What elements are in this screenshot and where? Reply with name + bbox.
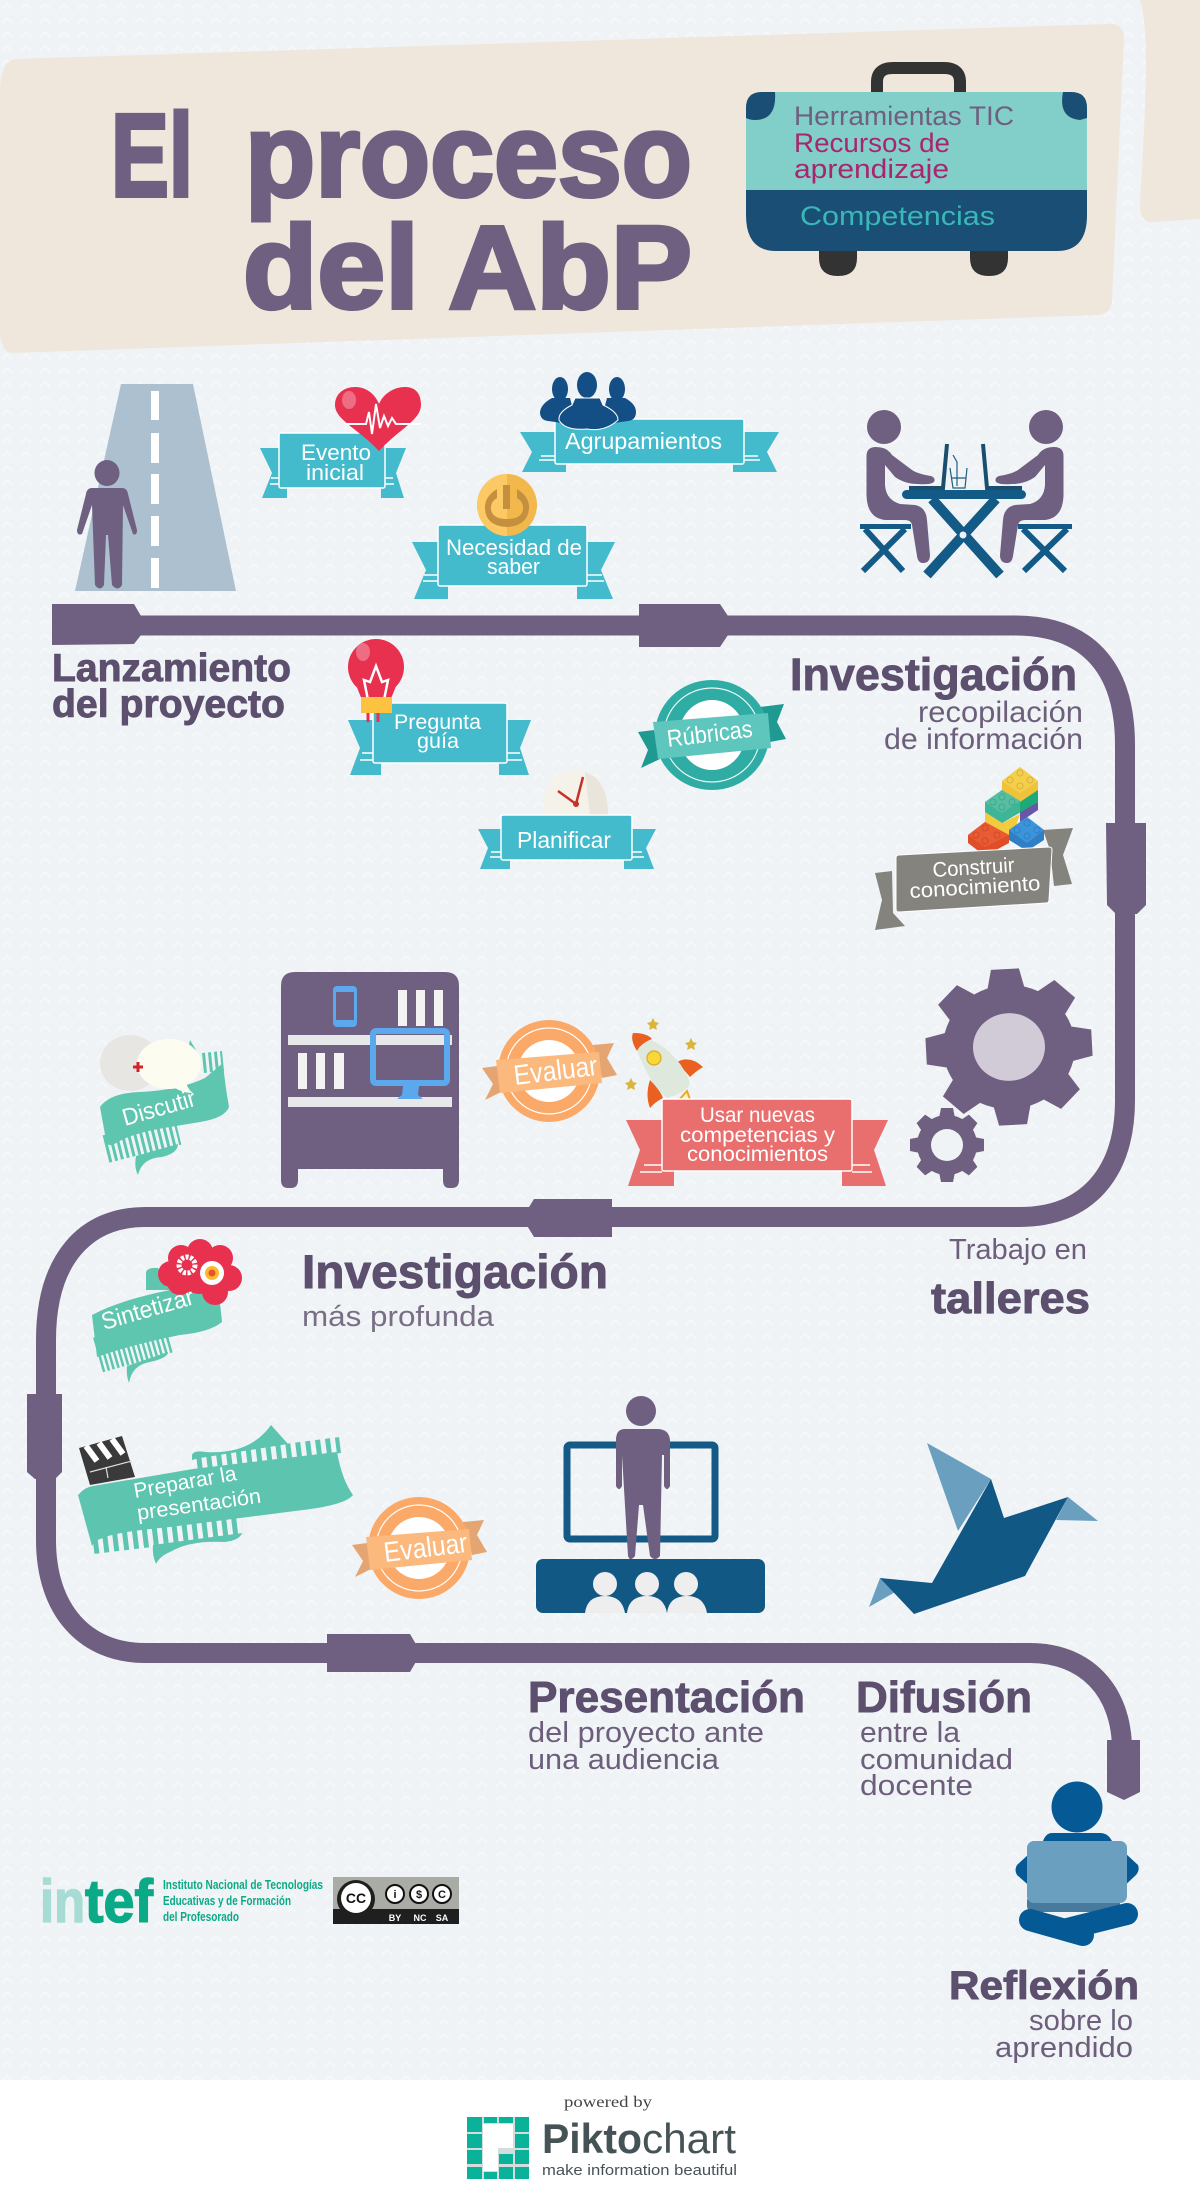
icon: presenter on stage [536, 1396, 765, 1613]
logo: creative commons: i [393, 1889, 397, 1901]
icon: heart [335, 387, 421, 451]
ribbon: Necesidad de saber [412, 474, 615, 599]
logo: creative commons: CC [346, 1890, 366, 1906]
logo: Piktochart: chart [642, 2115, 736, 2162]
ribbon: Agrupamientos: Agrupamientos [565, 428, 722, 454]
badge: Rubricas: Rúbricas [665, 716, 754, 753]
logo: creative commons: BY [389, 1913, 401, 1923]
ribbon: Usar nuevas competencias y conocimientos: Usar nuevas [700, 1104, 815, 1127]
heading: Difusion: entre la [860, 1717, 961, 1749]
icon: power button [477, 474, 537, 536]
logo: Piktochart: make information beautiful [542, 2162, 737, 2179]
heading: Investigacion recopilacion de informacion [790, 649, 1083, 756]
suitcase text: Herramientas TIC [794, 101, 1014, 131]
ribbon: Usar nuevas competencias y conocimientos: conocimientos [687, 1143, 828, 1166]
heading: Investigacion mas profunda: más profunda [302, 1301, 495, 1333]
ribbon: Preparar la presentacion [78, 1425, 353, 1564]
heading: Difusion [856, 1673, 1032, 1802]
ribbon: Sintetizar: Sintetizar [98, 1284, 197, 1336]
heading: Reflexion [949, 1964, 1139, 2064]
suitcase text: Recursos de [794, 128, 950, 158]
logo: Piktochart [467, 2115, 737, 2179]
side banner [1140, 0, 1200, 222]
logo: creative commons: C [438, 1889, 446, 1901]
table [902, 490, 1026, 575]
logo: intef: tef [85, 1868, 154, 1935]
heading: Lanzamiento del proyecto: Lanzamiento [52, 647, 291, 690]
logo: intef: in [40, 1868, 85, 1935]
ribbon: Pregunta guia: guía [417, 730, 459, 753]
heading: Reflexion: Reflexión [949, 1964, 1139, 2008]
icon: group of people [540, 372, 636, 430]
badge: Evaluar 2: Evaluar [382, 1527, 469, 1568]
icon: lego blocks [968, 767, 1044, 856]
person [77, 460, 137, 588]
right person [995, 410, 1064, 563]
logo: intef: Educativas y de Formación [163, 1893, 291, 1908]
heading: Difusion: Difusión [856, 1673, 1032, 1722]
heading: Trabajo en talleres: talleres [931, 1274, 1090, 1323]
badge: Rubricas [638, 680, 786, 790]
heading: Reflexion: aprendido [995, 2032, 1133, 2064]
ribbon: Necesidad de saber: Necesidad de [446, 535, 582, 560]
badge: Evaluar [482, 1020, 617, 1122]
logo: creative commons: $ [416, 1889, 422, 1901]
footer: powered by: powered by [564, 2094, 652, 2111]
ribbon: Discutir: Discutir [119, 1085, 199, 1132]
stools [860, 526, 1072, 571]
ribbon: Discutir [100, 1035, 229, 1175]
badge: Evaluar 2 [352, 1497, 487, 1599]
lower stripes [93, 1524, 242, 1542]
heading: Presentacion: una audiencia [528, 1744, 720, 1776]
logo: intef: Instituto Nacional de Tecnologías [163, 1877, 323, 1892]
ribbon: Sintetizar [92, 1239, 242, 1383]
ribbon: Evento inicial: inicial [306, 460, 364, 485]
ribbon: Preparar la presentacion: Preparar la [132, 1462, 239, 1503]
icon: rocket [625, 1018, 703, 1108]
ribbon: Necesidad de saber: saber [487, 554, 540, 579]
suitcase [746, 68, 1087, 276]
banner: Construir conocimiento [875, 767, 1073, 930]
icon: speech bubbles [100, 1035, 201, 1093]
ribbon: Planificar [478, 770, 656, 869]
heading: Lanzamiento del proyecto: del proyecto [52, 683, 285, 726]
laptops [909, 444, 1022, 488]
title banner [0, 24, 1124, 353]
logo: intef [40, 1868, 323, 1935]
suitcase text [794, 101, 1014, 231]
icon: small gear [910, 1108, 984, 1182]
title [111, 90, 692, 334]
ribbon: Usar nuevas competencias y conocimientos: competencias y [680, 1124, 836, 1147]
heading: Investigacion mas profunda: Investigación [302, 1245, 608, 1298]
icon: person reflecting with laptop [1016, 1782, 1139, 1935]
track connectors [27, 604, 1146, 1800]
heading: Investigacion recopilacion de informacion: de información [884, 723, 1083, 756]
ribbon: Planificar: Planificar [517, 827, 611, 853]
logo: Piktochart: Pikto [542, 2115, 642, 2162]
heading: Investigacion mas profunda [302, 1245, 608, 1333]
logo: creative commons: NC [414, 1913, 427, 1923]
icon: clock [543, 770, 608, 815]
icon: cabinet with tools [281, 972, 459, 1188]
heading: Trabajo en talleres [931, 1234, 1090, 1323]
icon: big gear [922, 965, 1096, 1129]
icon: light bulb [348, 639, 404, 722]
logo: creative commons: SA [436, 1913, 449, 1923]
phone [333, 986, 357, 1027]
suitcase text: aprendizaje [794, 154, 949, 184]
banner: Construir conocimiento: Construir [932, 854, 1015, 882]
presenter [616, 1396, 670, 1559]
ribbon: Evento inicial: Evento [301, 440, 371, 465]
ribbon: Agrupamientos [520, 372, 779, 472]
badge: Evaluar: Evaluar [512, 1050, 599, 1091]
heading: Investigacion recopilacion de informacion: recopilación [918, 696, 1083, 729]
stripes [203, 1061, 223, 1063]
suitcase text: Competencias [800, 201, 995, 231]
glass [950, 455, 967, 488]
heading: Reflexion: sobre lo [1029, 2005, 1133, 2037]
icon: clapperboard [79, 1436, 135, 1485]
heading: Presentacion: Presentación [528, 1673, 805, 1722]
ribbon: Evento inicial [260, 387, 421, 498]
audience [585, 1572, 707, 1613]
upper stripes [197, 1445, 340, 1463]
main band [78, 1452, 353, 1546]
heading: Difusion: docente [860, 1770, 973, 1802]
ribbon: Pregunta guia [348, 639, 531, 775]
ribbon: Pregunta guia: Pregunta [394, 711, 481, 734]
road with person [75, 384, 236, 591]
icon: flower with gears [158, 1239, 242, 1305]
monitor [373, 1031, 447, 1099]
left person [866, 410, 935, 563]
banner: Construir conocimiento: conocimiento [909, 872, 1041, 903]
ribbon: Usar nuevas competencias y conocimientos [626, 1099, 888, 1186]
title: El [111, 90, 193, 222]
heading: Difusion: comunidad [860, 1744, 1013, 1776]
heading: Investigacion recopilacion de informacion: Investigación [790, 649, 1077, 700]
title: del AbP [243, 202, 692, 334]
heading: Trabajo en talleres: Trabajo en [949, 1234, 1087, 1266]
icon: origami bird [869, 1443, 1098, 1614]
heading: Lanzamiento del proyecto [52, 647, 291, 726]
heading: Presentacion [528, 1673, 805, 1776]
logo: creative commons [333, 1877, 459, 1924]
logo: intef: del Profesorado [163, 1909, 239, 1924]
ribbon: Preparar la presentacion: presentación [135, 1485, 262, 1525]
icon: people working at table [860, 410, 1072, 575]
heading: Presentacion: del proyecto ante [528, 1717, 764, 1749]
title: proceso [245, 90, 692, 222]
process track [46, 626, 1125, 1750]
